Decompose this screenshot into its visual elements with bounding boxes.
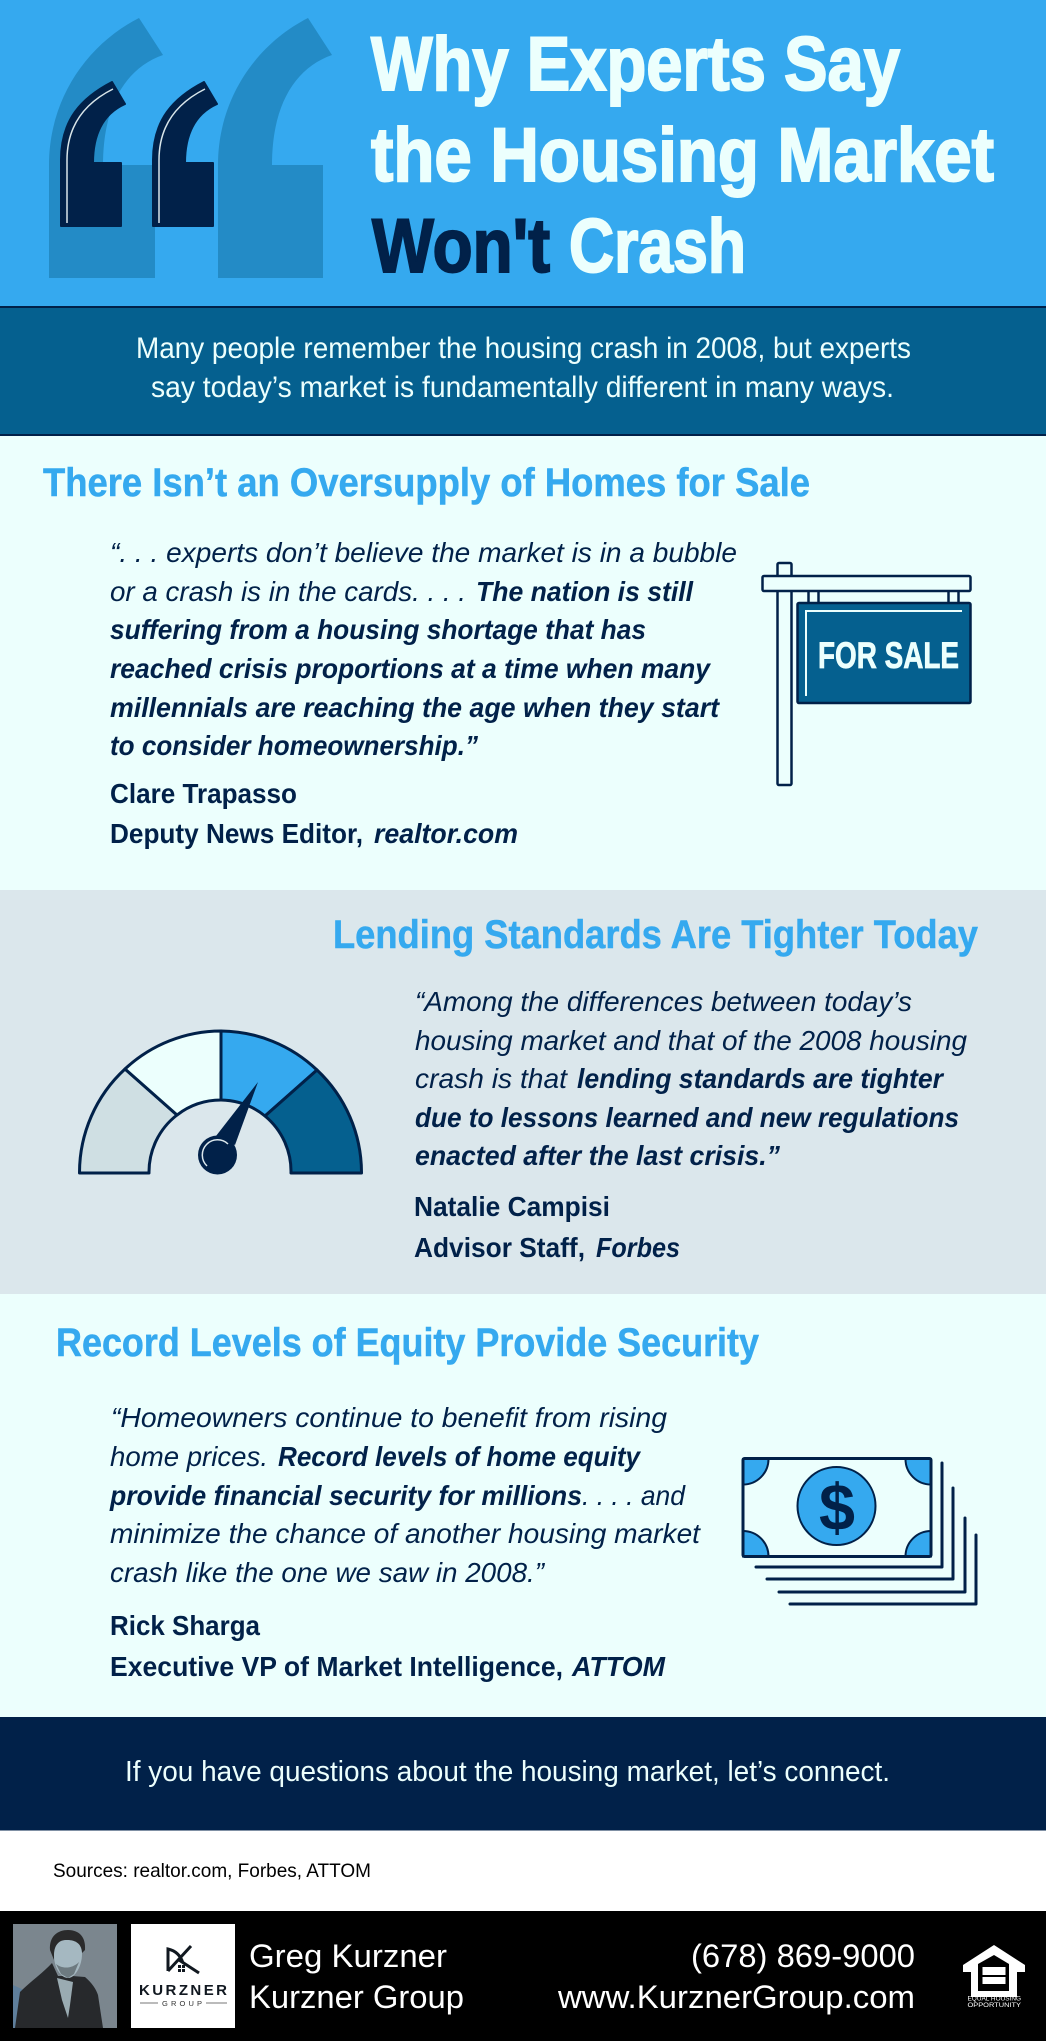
attribution: Natalie Campisi: [414, 1191, 680, 1263]
icon: equal housing opportunity: [963, 1945, 1025, 2009]
title: Crash: [569, 204, 746, 289]
icon: stack of money: $: [819, 1470, 855, 1544]
quote: Clare Trapasso: or a crash is in the cards. . . .: [110, 576, 466, 607]
heading: lending standards: Lending Standards Are Tighter Today: [333, 913, 979, 957]
panel: call to action: [0, 1717, 1046, 1830]
attribution: Rick Sharga: ATTOM: [571, 1651, 666, 1682]
quote: Natalie Campisi: crash is that: [415, 1063, 568, 1094]
quote: Rick Sharga: . . . . and: [582, 1480, 686, 1511]
logo: Kurzner Group: [131, 1924, 235, 2028]
intro text: say today’s market is fundamentally different in many ways.: [151, 371, 894, 404]
quote: Natalie Campisi: “Among the differences between today’s: [415, 986, 912, 1017]
quote: Natalie Campisi: due to lessons learned and new regulations: [415, 1102, 959, 1133]
attribution: Natalie Campisi: Forbes: [596, 1232, 680, 1263]
attribution: Rick Sharga: [110, 1610, 666, 1682]
quote: Natalie Campisi: [415, 986, 967, 1171]
quote: Natalie Campisi: housing market and that of the 2008 housing: [415, 1025, 967, 1056]
panel: intro band: [0, 306, 1046, 436]
agent contact: www.KurznerGroup.com: [557, 1979, 915, 2015]
quote: Rick Sharga: “Homeowners continue to benefit from rising: [111, 1402, 667, 1433]
agent name: Kurzner Group: [249, 1979, 464, 2015]
quote: Clare Trapasso: suffering from a housing shortage that has: [110, 614, 646, 645]
portrait: [13, 1924, 117, 2028]
icon: gauge: [79, 1031, 362, 1174]
attribution: Rick Sharga: Rick Sharga: [110, 1610, 260, 1641]
attribution: Clare Trapasso: Deputy News Editor,: [110, 818, 363, 849]
attribution: Rick Sharga: Executive VP of Market Intelligence,: [110, 1651, 563, 1682]
panel: oversupply section: [0, 436, 1046, 890]
intro text: Many people remember the housing crash in 2008, but experts: [136, 332, 911, 365]
title: Why Experts Say: [371, 22, 900, 107]
panel: equity section: [0, 1294, 1046, 1717]
icon: navy quotation marks: [61, 82, 217, 226]
logo: Kurzner Group: GROUP: [162, 1999, 202, 2008]
agent name: Greg Kurzner: [249, 1938, 447, 1974]
attribution: Clare Trapasso: Clare Trapasso: [110, 778, 297, 809]
logo: Kurzner Group: KURZNER: [139, 1982, 227, 1999]
agent contact: (678) 869-9000: [691, 1938, 915, 1974]
attribution: Natalie Campisi: Natalie Campisi: [414, 1191, 610, 1222]
agent name: [249, 1938, 464, 2015]
icon: for sale sign: [762, 563, 970, 785]
icon: stack of money: [743, 1458, 976, 1604]
intro text: [136, 332, 911, 404]
sources text: Sources: realtor.com, Forbes, ATTOM: [53, 1860, 371, 1882]
icon: equal housing opportunity: OPPORTUNITY: [968, 2002, 1022, 2009]
quote: Clare Trapasso: [110, 537, 737, 761]
attribution: Natalie Campisi: Advisor Staff,: [414, 1232, 585, 1263]
panel: sources: [0, 1830, 1046, 1911]
panel: header: [0, 0, 1046, 306]
heading: equity: Record Levels of Equity Provide Security: [56, 1321, 760, 1365]
quote: Natalie Campisi: lending standards are tighter: [577, 1063, 945, 1094]
icon: house logomark: [168, 1946, 199, 1973]
icon: equal housing opportunity: EQUAL HOUSING: [968, 1996, 1021, 2002]
title: [371, 22, 994, 289]
quote: Clare Trapasso: millennials are reaching the age when they start: [110, 692, 721, 723]
quote: Rick Sharga: [109, 1402, 701, 1588]
quote: Rick Sharga: crash like the one we saw in 2008.”: [110, 1557, 546, 1588]
quote: Natalie Campisi: enacted after the last crisis.”: [415, 1140, 780, 1171]
quote: Rick Sharga: provide financial security for millions: [109, 1480, 582, 1511]
title: Won't: [372, 204, 550, 289]
quote: Rick Sharga: home prices.: [110, 1441, 268, 1472]
quote: Clare Trapasso: “. . . experts don’t believe the market is in a bubble: [110, 537, 737, 568]
agent contact: [557, 1938, 915, 2015]
call to action text: If you have questions about the housing market, let’s connect.: [125, 1756, 890, 1788]
attribution: Clare Trapasso: realtor.com: [374, 818, 518, 849]
icon: large background quotation marks: [49, 18, 332, 278]
quote: Clare Trapasso: reached crisis proportions at a time when many: [110, 653, 711, 684]
icon: for sale sign: FOR SALE: [818, 635, 959, 676]
panel: agent footer: [0, 1911, 1046, 2041]
quote: Clare Trapasso: to consider homeownership.”: [110, 730, 478, 761]
panel: lending standards section: [0, 890, 1046, 1294]
attribution: Clare Trapasso: [110, 778, 518, 849]
quote: Rick Sharga: Record levels of home equity: [278, 1441, 641, 1472]
quote: Rick Sharga: minimize the chance of another housing market: [110, 1518, 701, 1549]
quote: Clare Trapasso: The nation is still: [476, 576, 694, 607]
heading: oversupply: There Isn’t an Oversupply of Homes for Sale: [43, 461, 810, 505]
